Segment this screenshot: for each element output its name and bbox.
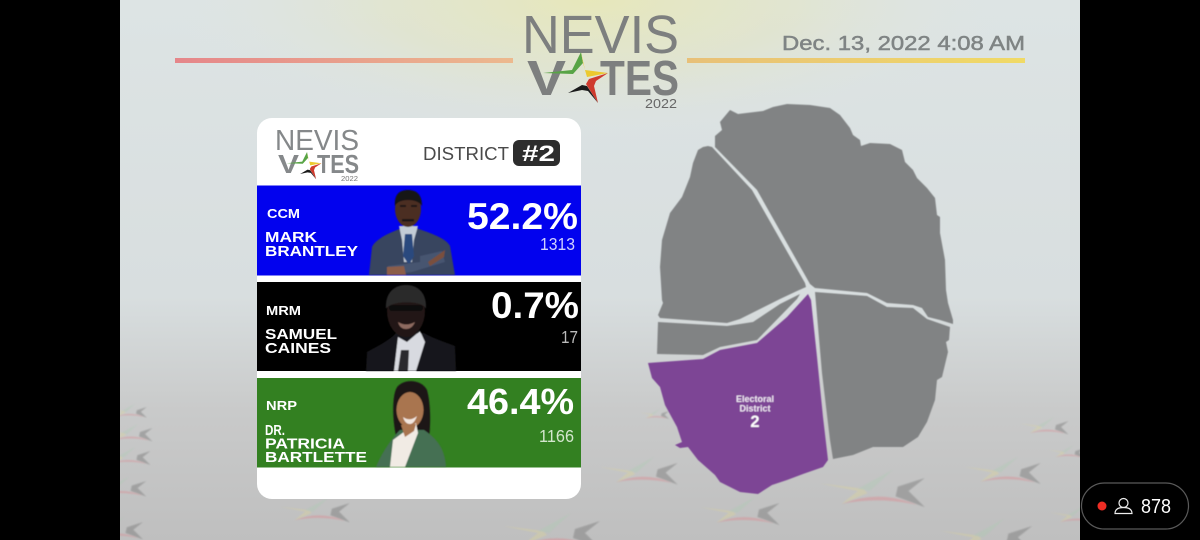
portrait: Patricia Bartlette <box>376 381 446 467</box>
district: west <box>658 146 806 323</box>
district label: DISTRICT <box>423 143 509 164</box>
top logo: Nevis Votes 2022: V <box>527 52 566 106</box>
row: NRP Dr. Patricia Bartlette <box>257 378 581 468</box>
icon: live dot <box>1098 502 1106 510</box>
district 2 highlighted: Electoral <box>736 394 774 404</box>
row: NRP Dr. Patricia Bartlette: DR. <box>265 422 285 439</box>
row: CCM Mark Brantley: MARK <box>265 229 317 246</box>
row: MRM Samuel Caines <box>257 282 581 371</box>
row: NRP Dr. Patricia Bartlette: 1166 <box>539 426 574 446</box>
row: CCM Mark Brantley: CCM <box>267 207 300 221</box>
row: CCM Mark Brantley <box>257 186 581 276</box>
row: MRM Samuel Caines: MRM <box>266 304 301 318</box>
top logo: Nevis Votes 2022: TES <box>600 52 679 106</box>
district label <box>423 140 560 166</box>
row: NRP Dr. Patricia Bartlette: NRP <box>266 399 297 413</box>
small logo: TES <box>317 149 359 179</box>
row: MRM Samuel Caines: CAINES <box>265 340 331 357</box>
district 2 highlighted: 2 <box>750 413 760 431</box>
district: north <box>715 104 953 324</box>
live viewer counter <box>1082 483 1188 529</box>
row: NRP Dr. Patricia Bartlette: 46.4% <box>467 381 574 422</box>
row: CCM Mark Brantley: 52.2% <box>467 196 578 237</box>
row: NRP Dr. Patricia Bartlette: BARTLETTE <box>265 449 367 466</box>
date and time stamp: Dec. 13, 2022 4:08 AM <box>782 32 1025 55</box>
portrait: Mark Brantley <box>369 190 455 275</box>
left header line <box>175 58 513 63</box>
portrait: Samuel Caines <box>366 285 456 371</box>
row: MRM Samuel Caines: SAMUEL <box>265 326 337 343</box>
top logo: Nevis Votes 2022 <box>522 5 679 111</box>
icon: person <box>1115 498 1132 514</box>
map: Nevis electoral districts <box>648 104 953 494</box>
district 2 highlighted: District <box>739 404 771 414</box>
row: MRM Samuel Caines: 0.7% <box>491 285 579 326</box>
small logo: V <box>278 149 300 179</box>
top logo: Nevis Votes 2022: 2022 <box>645 97 677 111</box>
row: NRP Dr. Patricia Bartlette: PATRICIA <box>265 436 345 452</box>
small logo: 2022 <box>341 176 358 183</box>
right header line <box>687 58 1025 63</box>
row: MRM Samuel Caines: 17 <box>561 327 578 347</box>
small logo: NEVIS <box>275 125 359 157</box>
panel: results card <box>257 118 581 499</box>
district 2 highlighted <box>648 294 828 494</box>
row: CCM Mark Brantley: 1313 <box>540 234 575 254</box>
small logo <box>275 125 359 183</box>
district: east <box>815 292 950 459</box>
district: southwest strip <box>657 294 800 355</box>
live viewer counter: 878 <box>1141 496 1171 518</box>
row: CCM Mark Brantley: BRANTLEY <box>265 243 358 260</box>
district label: #2 <box>522 141 555 166</box>
top logo: Nevis Votes 2022: NEVIS <box>522 5 679 65</box>
